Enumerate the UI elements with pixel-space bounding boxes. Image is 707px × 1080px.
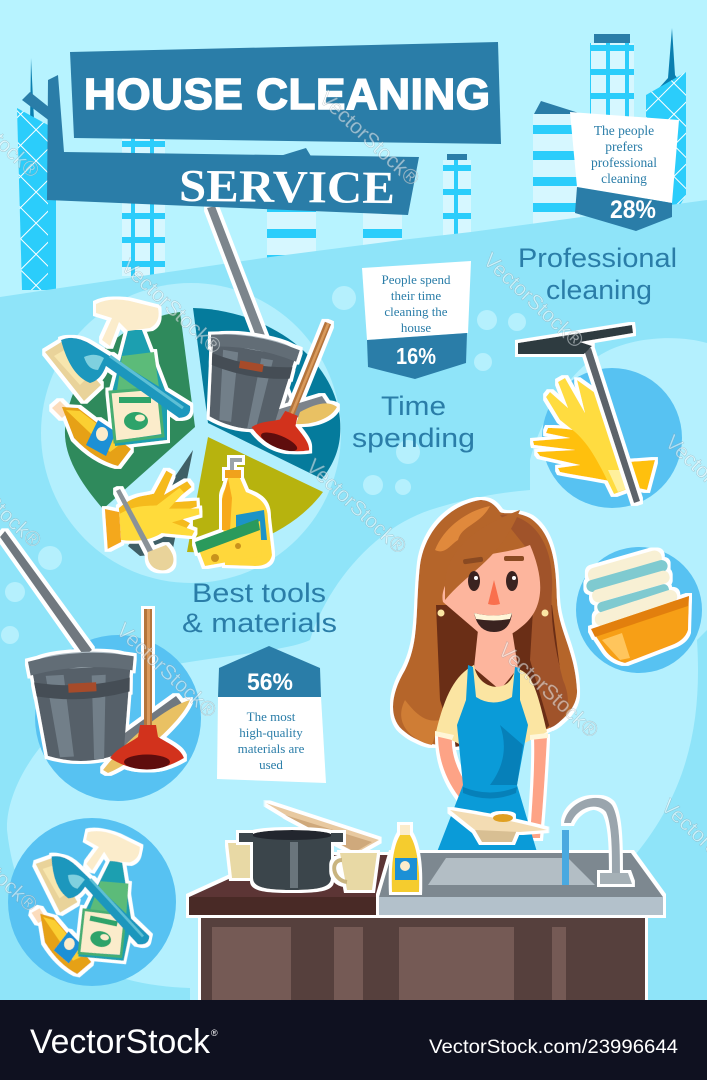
callout: 56 percent: high-quality xyxy=(239,725,303,740)
callout: 28 percent: prefers xyxy=(605,139,643,154)
kitchen counter xyxy=(189,798,663,1000)
building: left lattice tower xyxy=(17,58,56,290)
footer bar: VectorStock xyxy=(30,1023,211,1061)
footer bar xyxy=(0,1000,707,1080)
plate held xyxy=(450,810,547,842)
sink basin xyxy=(428,858,595,885)
cabinets xyxy=(201,915,645,1000)
icon: squeegee and gloves xyxy=(518,325,655,503)
callout: 16 percent: their time xyxy=(391,288,441,303)
watermarks: VectorStock® xyxy=(302,455,411,559)
icon: spray, brush and bottle group xyxy=(45,300,190,466)
banner: house cleaning xyxy=(70,42,501,144)
pie: teal wedge xyxy=(193,308,340,479)
callout: 16 percent: 16% xyxy=(396,343,436,369)
icon: spray, brush and bottle lower xyxy=(15,819,169,987)
pie: slate wedge xyxy=(128,450,193,556)
callout: 28 percent xyxy=(570,112,679,231)
faucet xyxy=(564,798,632,884)
callout: 56 percent: The most xyxy=(247,709,296,724)
sink counter xyxy=(379,853,663,915)
banner: service: SERVICE xyxy=(179,160,395,213)
callout: 56 percent: used xyxy=(259,757,283,772)
heading: best tools and materials xyxy=(182,578,337,638)
dish soap bottle xyxy=(392,825,419,892)
cup right xyxy=(334,853,377,890)
building: fifth xyxy=(443,154,471,236)
callout: 16 percent xyxy=(362,261,471,379)
icon: cleaner bottle and sponge xyxy=(195,458,272,566)
heading: time spending: spending xyxy=(352,423,475,453)
icon: plates and bowl xyxy=(585,549,689,663)
heading: professional cleaning: Professional xyxy=(518,243,677,273)
heading: best tools and materials: & materials xyxy=(182,608,337,638)
watermarks: VectorStock® xyxy=(112,619,221,723)
mop pole top xyxy=(207,206,292,410)
building: right tower xyxy=(646,28,686,205)
callout: 28 percent: 28% xyxy=(610,196,656,224)
callout: 16 percent: People spend xyxy=(382,272,451,287)
banner: service xyxy=(47,75,419,215)
plates behind pot xyxy=(266,803,379,853)
pie: olive wedge xyxy=(187,437,323,552)
city skyline xyxy=(17,28,686,290)
water xyxy=(562,830,569,885)
bubbles xyxy=(1,286,526,644)
icon: bucket, plunger and floor brush xyxy=(196,311,356,459)
pie chart xyxy=(65,308,340,556)
building: right tall xyxy=(590,34,634,118)
hair xyxy=(393,500,577,747)
watermarks: VectorStock® xyxy=(479,249,588,353)
callout: 56 percent: 56% xyxy=(247,669,293,696)
callout: 16 percent: house xyxy=(401,320,431,335)
arms xyxy=(438,735,547,838)
callout: 16 percent: cleaning the xyxy=(384,304,448,319)
callout: 28 percent: The people xyxy=(594,123,654,138)
watermarks xyxy=(0,79,707,917)
wooden top xyxy=(189,855,388,915)
icon: bucket, plunger and floor brush lower xyxy=(0,531,190,773)
callout: 56 percent xyxy=(217,646,326,783)
footer bar: VectorStock.com/23996644 xyxy=(429,1037,678,1058)
heading: time spending: Time xyxy=(381,391,446,421)
neck xyxy=(474,630,518,690)
heading: professional cleaning xyxy=(518,243,677,305)
heading: professional cleaning: cleaning xyxy=(546,275,652,305)
gloves large xyxy=(533,378,655,494)
heading: best tools and materials: Best tools xyxy=(192,578,326,608)
building: right block xyxy=(533,101,582,224)
woman xyxy=(393,500,577,852)
sleeves and blouse xyxy=(435,665,548,760)
callout: 28 percent: professional xyxy=(591,155,657,170)
callout: 28 percent: cleaning xyxy=(601,171,647,186)
circle backdrops xyxy=(8,283,702,986)
watermarks: VectorStock® xyxy=(315,87,424,191)
building: third xyxy=(267,148,316,260)
banner: house cleaning: HOUSE CLEANING xyxy=(84,70,490,119)
heading: time spending xyxy=(352,391,475,453)
building: second xyxy=(122,138,165,276)
callout: 56 percent: materials are xyxy=(238,741,305,756)
icon: gloves and dust brush xyxy=(103,469,201,570)
face xyxy=(435,506,548,640)
watermarks: VectorStock® xyxy=(494,639,603,743)
cup left xyxy=(228,843,255,878)
pie: green wedge xyxy=(65,312,195,509)
watermarks: VectorStock® xyxy=(117,255,226,359)
building: fourth xyxy=(363,210,402,246)
pot xyxy=(239,830,343,890)
footer bar: ® xyxy=(211,1028,218,1038)
apron xyxy=(437,665,537,852)
squeegee xyxy=(518,325,640,503)
hill background layer xyxy=(0,200,707,1000)
